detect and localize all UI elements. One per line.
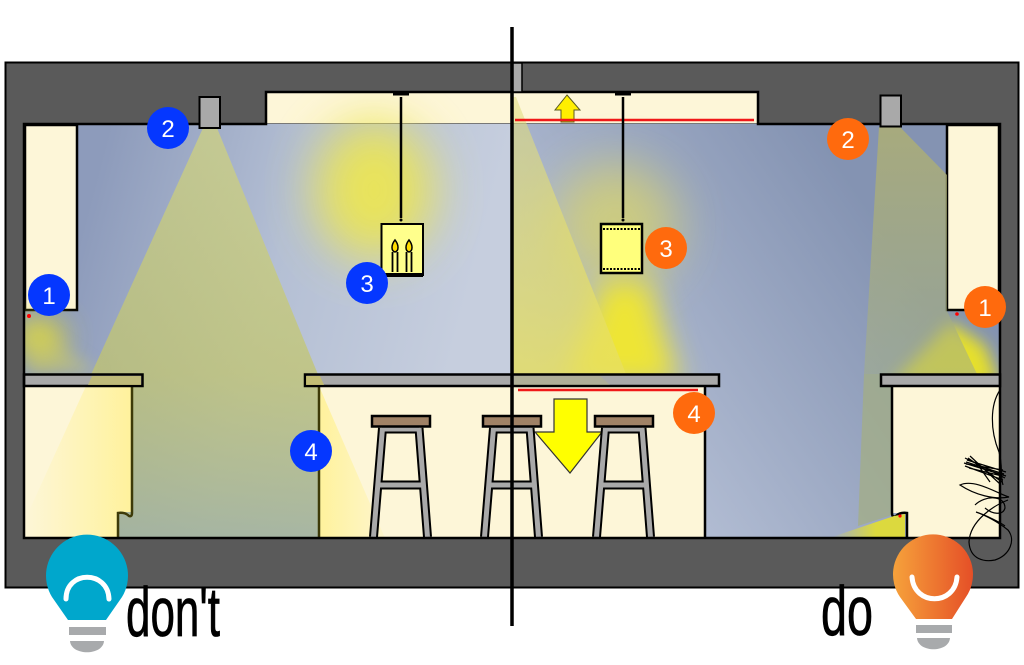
toe kick light right [832,514,905,537]
arrow: light down under counter [535,399,602,473]
wall washer fixture centre [512,63,522,92]
label: do: do [821,572,873,650]
label: don't: don't [126,573,220,651]
badge: blue 4: 4 [304,439,318,466]
pendant shade [601,94,642,273]
building section wall [6,62,1018,588]
icon: orange bulb [893,534,973,649]
recessed fixture left [200,97,220,128]
pendant lantern with candles [381,94,423,275]
badge: blue 2 [147,107,189,149]
divider line [510,27,514,626]
beam: centre wall washer [512,97,626,374]
badge: blue 1: 1 [42,283,56,310]
icon: blue bulb [46,535,128,652]
beam: right recessed downlight [864,127,977,374]
stool 2 [483,416,541,537]
red LED strip under counter [518,389,698,391]
recessed fixture right [880,96,901,126]
base cabinet right [892,386,1000,538]
room outline [24,92,1000,538]
badge: blue 1 [28,274,70,316]
badge: orange 4: 4 [687,401,701,428]
beam: left recessed downlight [92,129,318,537]
base cabinet left [24,386,132,538]
left side light glows [14,120,434,374]
island [319,386,705,538]
counter tops [24,374,1000,386]
red LED dots [27,312,959,318]
badge: orange 1: 1 [978,295,992,322]
signature scribble [960,390,1012,561]
badge: orange 3: 3 [659,236,673,263]
arrow: light up in cove [555,95,580,122]
badge: blue 4 [290,430,332,472]
badge: orange 1 [964,286,1006,328]
beam: right lower column [858,374,892,526]
badge: blue 3 [346,262,388,304]
badge: orange 4 [673,392,715,434]
room interior [24,92,1000,538]
red LED strip in cove [515,119,754,121]
stool 1 [372,416,430,537]
stool 3 [595,416,653,537]
badge: orange 3 [645,227,687,269]
badge: blue 3: 3 [360,271,374,298]
badge: orange 2: 2 [841,127,855,154]
badge: blue 2: 2 [161,116,175,143]
badge: orange 2 [827,118,869,160]
right side light glows [553,163,1000,385]
upper cabinets [25,125,999,310]
